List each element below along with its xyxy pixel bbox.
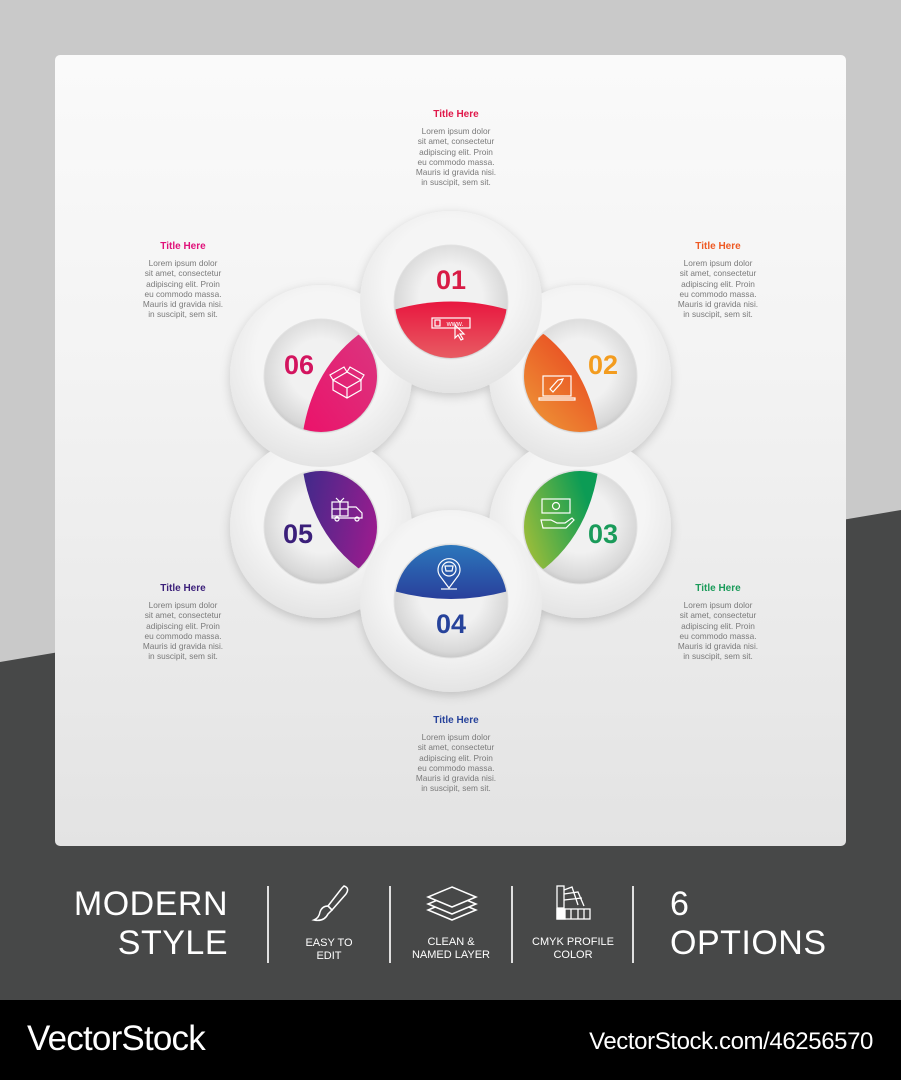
step 06 — [264, 319, 385, 440]
text block 01: adipiscing elit. Proin — [419, 147, 493, 157]
text block 06: adipiscing elit. Proin — [146, 279, 220, 289]
step 02 — [520, 319, 637, 440]
text block 04: adipiscing elit. Proin — [419, 753, 493, 763]
icon: www: www. — [446, 321, 463, 328]
text block 05: adipiscing elit. Proin — [146, 621, 220, 631]
text block 01: eu commodo massa. — [417, 157, 494, 167]
caption: cmyk: CMYK PROFILE — [532, 936, 614, 948]
text block 05: Title Here — [160, 583, 206, 594]
step 01 — [394, 244, 508, 360]
caption: clean & named layer: CLEAN & — [427, 936, 475, 948]
watermark left: VectorStock — [27, 1019, 205, 1058]
text block 02: adipiscing elit. Proin — [681, 279, 755, 289]
heading: 6 options: 6 — [670, 885, 689, 923]
text block 02: eu commodo massa. — [679, 289, 756, 299]
text block 04: Mauris id gravida nisi. — [416, 773, 496, 783]
icon: money hand — [541, 499, 574, 528]
heading: modern style — [74, 885, 228, 962]
text block 01: Lorem ipsum dolor — [422, 126, 490, 136]
text block 03: Title Here — [695, 583, 741, 594]
text block 02: Title Here — [695, 241, 741, 252]
text block 04: in suscipit, sem sit. — [421, 783, 491, 793]
text block 01: Title Here — [433, 109, 479, 120]
text block 03: Mauris id gravida nisi. — [678, 641, 758, 651]
text block 05: eu commodo massa. — [144, 631, 222, 641]
step 05: 05 — [283, 519, 313, 549]
icon: location cart — [438, 559, 460, 589]
watermark right: VectorStock.com/46256570 — [589, 1028, 873, 1055]
text block 06: eu commodo massa. — [144, 289, 222, 299]
text block 03 — [678, 583, 758, 661]
caption: easy to edit — [305, 937, 353, 962]
text block 01: in suscipit, sem sit. — [421, 177, 491, 187]
text block 04: Lorem ipsum dolor — [422, 732, 490, 742]
text block 06: Lorem ipsum dolor — [149, 258, 217, 268]
heading: 6 options — [670, 885, 827, 962]
diagram: six interlocking rings — [226, 210, 675, 699]
text block 05: sit amet, consectetur — [145, 610, 221, 620]
text block 05: in suscipit, sem sit. — [148, 651, 218, 661]
icon: swatches — [556, 885, 591, 920]
step 05 — [264, 470, 378, 584]
icon: gift truck — [332, 498, 362, 521]
icon: brush — [312, 885, 348, 922]
text block 06: sit amet, consectetur — [145, 268, 221, 278]
step 04 — [390, 540, 512, 658]
caption: clean & named layer: NAMED LAYER — [412, 949, 490, 961]
step 03 — [520, 460, 637, 584]
text block 02: sit amet, consectetur — [680, 268, 756, 278]
text block 06: in suscipit, sem sit. — [148, 309, 218, 319]
text block 01: Mauris id gravida nisi. — [416, 167, 496, 177]
icon: box — [330, 367, 364, 398]
icon: laptop tag — [539, 376, 575, 400]
text block 02: in suscipit, sem sit. — [683, 309, 753, 319]
ring outers — [230, 211, 671, 692]
step 01: 01 — [436, 265, 466, 295]
caption: clean & named layer — [412, 936, 490, 961]
text block 04: eu commodo massa. — [417, 763, 494, 773]
text block 04: sit amet, consectetur — [418, 742, 494, 752]
heading: 6 options: OPTIONS — [670, 924, 827, 962]
text block 02: Mauris id gravida nisi. — [678, 299, 758, 309]
text block 02 — [678, 241, 758, 319]
text block 01 — [416, 109, 496, 187]
caption: easy to edit: EDIT — [316, 950, 342, 962]
text block 02: Lorem ipsum dolor — [684, 258, 752, 268]
heading: modern style: MODERN — [74, 885, 228, 923]
text block 01: sit amet, consectetur — [418, 136, 494, 146]
step 02: 02 — [588, 350, 618, 380]
text block 06: Title Here — [160, 241, 206, 252]
icon: layers — [426, 886, 478, 921]
step 04: 04 — [436, 609, 466, 639]
text block 05: Mauris id gravida nisi. — [143, 641, 223, 651]
text block 03: eu commodo massa. — [679, 631, 756, 641]
text block 03: sit amet, consectetur — [680, 610, 756, 620]
heading: modern style: STYLE — [118, 924, 228, 962]
text block 06 — [143, 241, 223, 319]
text block 06: Mauris id gravida nisi. — [143, 299, 223, 309]
step 06: 06 — [284, 350, 314, 380]
text block 03: Lorem ipsum dolor — [684, 600, 752, 610]
caption: cmyk — [532, 936, 614, 961]
caption: cmyk: COLOR — [553, 949, 593, 961]
caption: easy to edit: EASY TO — [305, 937, 353, 949]
card — [55, 55, 846, 846]
text block 03: adipiscing elit. Proin — [681, 621, 755, 631]
text block 04 — [416, 715, 496, 793]
step 03: 03 — [588, 519, 618, 549]
text block 04: Title Here — [433, 715, 479, 726]
text block 03: in suscipit, sem sit. — [683, 651, 753, 661]
text block 05 — [143, 583, 223, 661]
text block 05: Lorem ipsum dolor — [149, 600, 217, 610]
